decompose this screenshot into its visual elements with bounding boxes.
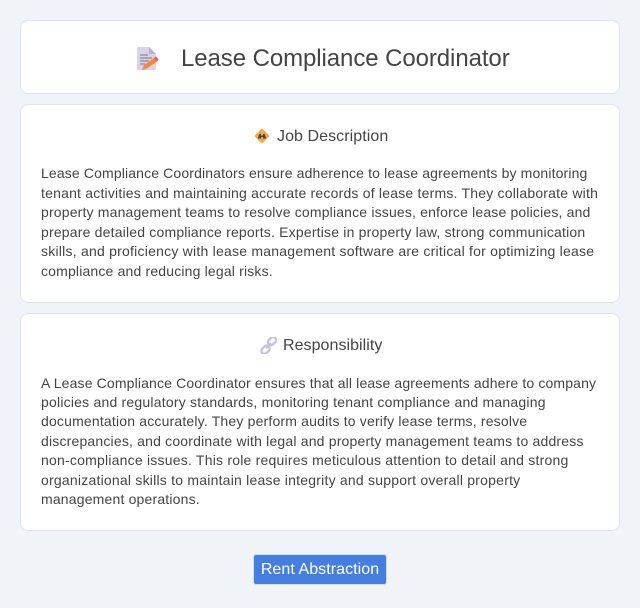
text: job description: tenant activities and maintaining accurate records of lease terms. They collaborate with [41,185,598,201]
icon: document with pencil [137,47,158,70]
text: job description: compliance and reducing legal risks. [41,263,273,279]
text: responsibility: A Lease Compliance Coordinator ensures that all lease agreements adhere to company [41,375,596,391]
panel: responsibility [20,313,620,531]
heading: responsibility: Responsibility [283,337,382,354]
text: responsibility [41,375,596,507]
button: rent abstraction: Rent Abstraction [261,561,379,578]
text: responsibility: discrepancies, and coordinate with legal and property management teams to address [41,433,584,449]
text: job description: Lease Compliance Coordinators ensure adherence to lease agreements by monitoring [41,165,587,181]
title: Lease Compliance Coordinator [181,45,510,72]
text: job description: skills, and proficiency with lease management software are critical for optimizing lease [41,243,594,259]
button: rent abstraction [253,554,387,585]
text: job description: property management teams to resolve compliance issues, enforce lease policies, and [41,204,591,220]
icon: diamond sign [254,128,270,144]
text: job description [41,165,598,279]
icon: chain link [260,337,277,354]
text: responsibility: non-compliance issues. This role requires meticulous attention to detail and strong [41,452,568,468]
heading: job description: Job Description [277,128,388,145]
text: responsibility: organizational skills to maintain lease integrity and support overall property [41,472,520,488]
text: job description: prepare detailed compliance reports. Expertise in property law, strong communication [41,224,585,240]
panel: job description [20,104,620,303]
text: responsibility: documentation accurately. They perform audits to verify lease terms, resolve [41,413,527,429]
text: responsibility: policies and regulatory standards, monitoring tenant compliance and managing [41,394,546,410]
panel: title card [20,20,620,94]
text: responsibility: management operations. [41,491,200,507]
